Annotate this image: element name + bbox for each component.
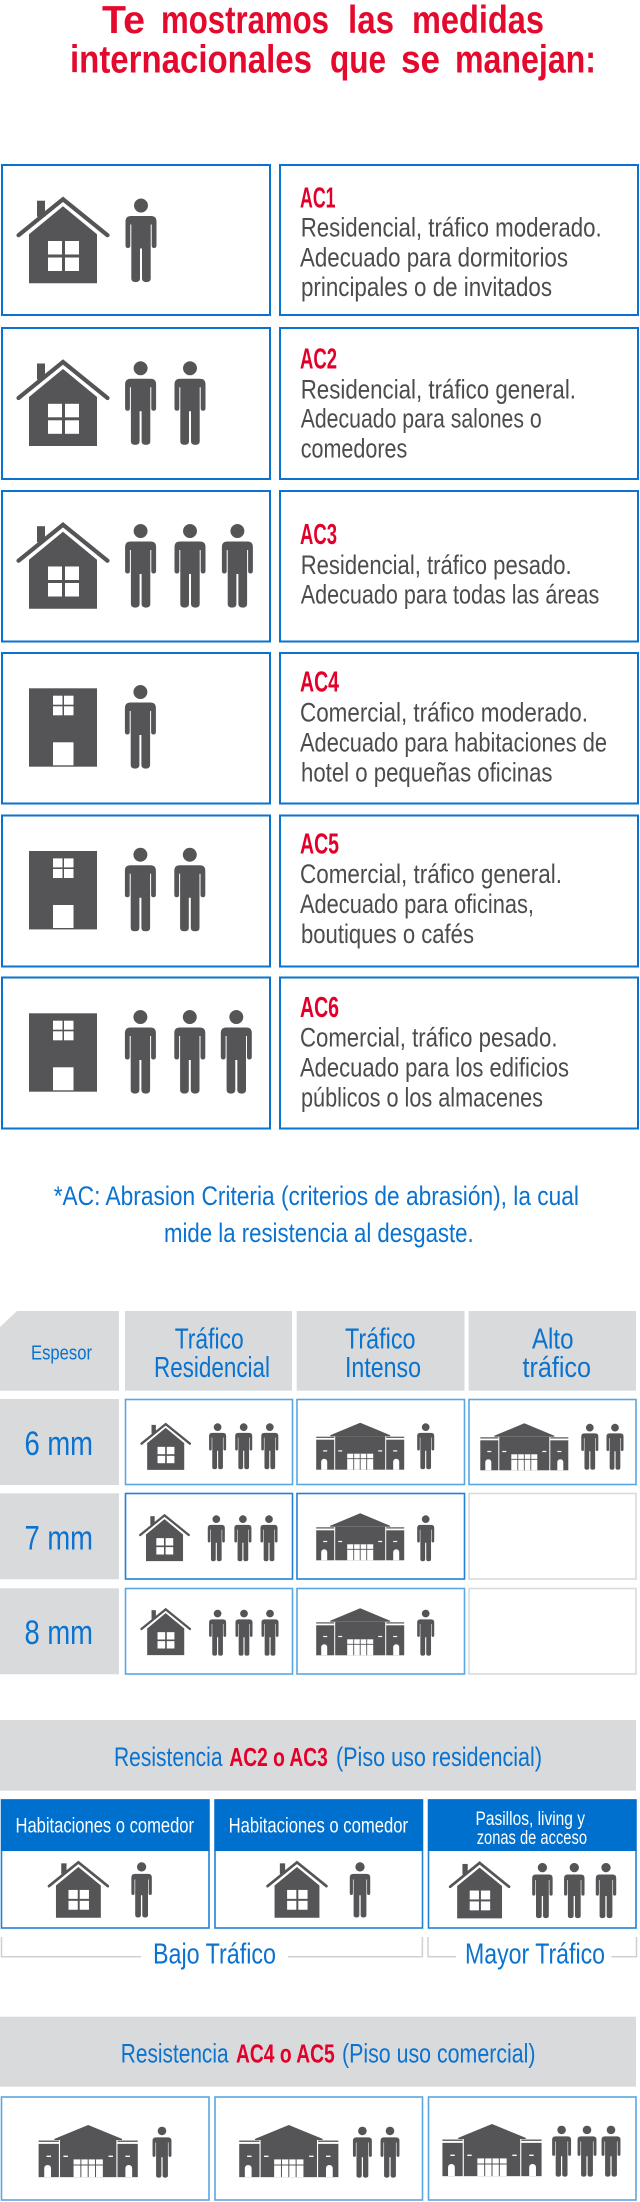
card: commercial, two people: [215, 2097, 422, 2200]
thickness table: [0, 1311, 636, 1674]
banner: commercial resistance: Resistencia: [121, 2039, 229, 2069]
icon: building: [29, 1013, 97, 1092]
footnote: mide la resistencia al desgaste.: [164, 1218, 474, 1248]
panel: AC1 row: [2, 165, 638, 315]
cell: intense, 6 mm: [297, 1400, 464, 1484]
AC3 label: AC3: [300, 519, 337, 551]
title: manejan:: [455, 39, 596, 82]
AC5 description: boutiques o cafés: [301, 919, 474, 949]
cell: intense, 7 mm: [297, 1494, 464, 1579]
AC2 label: AC2: [300, 343, 337, 375]
icon: house: [18, 199, 108, 283]
AC4 description: Comercial, tráfico moderado.: [300, 698, 588, 728]
header: Alto tráfico: Alto: [532, 1324, 574, 1356]
AC6 label: AC6: [300, 992, 339, 1024]
AC4 text panel: [280, 653, 638, 804]
label: 8 mm: 8 mm: [24, 1614, 93, 1652]
panel: AC6 row: [2, 978, 638, 1128]
icon: person 2: [174, 524, 206, 608]
footnote: [54, 1181, 579, 1248]
row: 7 mm: [0, 1493, 636, 1579]
header: Tráfico Intenso: Tráfico: [345, 1324, 416, 1356]
icon: person 3: [221, 1010, 252, 1094]
cell: high traffic, 6 mm: [469, 1400, 636, 1484]
icon: house: [18, 362, 108, 446]
icon: person: [126, 198, 156, 282]
header: Tráfico Residencial: [125, 1311, 292, 1391]
icon: person 2: [174, 848, 205, 931]
AC1 label: AC1: [300, 182, 336, 214]
AC3 text panel: [280, 491, 638, 642]
header: Tráfico Intenso: [297, 1311, 464, 1391]
AC2 text panel: [280, 328, 638, 479]
card: commercial, one person: [2, 2097, 209, 2200]
bracket: Bajo Tráfico: [2, 1937, 422, 1970]
label: 6 mm: 6 mm: [24, 1425, 93, 1463]
header: Alto tráfico: [469, 1311, 636, 1391]
cell: empty, 7 mm: [469, 1494, 636, 1579]
AC4 description: hotel o pequeñas oficinas: [301, 758, 552, 788]
header: Tráfico Residencial: Residencial: [154, 1352, 270, 1384]
card: Pasillos, living y zonas de acceso: [428, 1799, 636, 1928]
AC3 icon panel: [2, 491, 270, 642]
AC1 description: principales o de invitados: [301, 272, 552, 302]
AC4 description: [300, 698, 607, 788]
title: mostramos: [161, 0, 329, 42]
title: las: [348, 0, 394, 42]
panel: AC4 row: [2, 653, 638, 804]
banner: commercial resistance: AC4 o AC5: [236, 2039, 335, 2069]
AC3 description: Residencial, tráfico pesado.: [301, 550, 572, 580]
cell: residential, 6 mm: [126, 1400, 292, 1484]
AC6 icon panel: [2, 978, 270, 1128]
AC4 icon panel: [2, 653, 270, 804]
AC6 text panel: [280, 978, 638, 1128]
card: Habitaciones o comedor, low traffic: Habitaciones o comedor: [16, 1815, 194, 1838]
AC4 label: AC4: [300, 667, 339, 699]
row: 6 mm: [0, 1399, 636, 1485]
header: Tráfico Intenso: Intenso: [345, 1352, 421, 1384]
title: internacionales: [70, 39, 312, 82]
AC6 description: públicos o los almacenes: [301, 1083, 543, 1113]
card: Habitaciones o comedor, second: [214, 1799, 423, 1928]
AC5 description: Comercial, tráfico general.: [300, 859, 562, 889]
header: Espesor: Espesor: [31, 1341, 92, 1364]
icon: house: [18, 525, 108, 609]
AC5 description: [300, 859, 562, 949]
card: Pasillos, living y zonas de acceso: zonas de acceso: [477, 1828, 587, 1849]
AC6 description: Adecuado para los edificios: [300, 1053, 569, 1083]
title: Te: [102, 0, 145, 42]
AC6 description: Comercial, tráfico pesado.: [300, 1023, 558, 1053]
cell: residential, 7 mm: [126, 1494, 292, 1579]
card: Habitaciones o comedor, low traffic: [1, 1799, 210, 1928]
banner: residential resistance: (Piso uso residencial): [336, 1742, 542, 1772]
title: medidas: [412, 0, 544, 42]
banner: commercial resistance: [0, 2017, 636, 2087]
bracket: Bajo Tráfico: Bajo Tráfico: [153, 1938, 276, 1970]
banner: residential resistance: AC2 o AC3: [229, 1742, 328, 1772]
card: Pasillos, living y zonas de acceso: Pasillos, living y: [476, 1809, 585, 1830]
AC6 description: [300, 1023, 569, 1113]
panel: AC2 row: [2, 328, 638, 479]
banner: residential resistance: [0, 1720, 636, 1791]
AC2 icon panel: [2, 328, 270, 479]
header: Espesor: [0, 1311, 119, 1391]
title: se: [401, 39, 440, 82]
AC2 description: Adecuado para salones o: [301, 404, 542, 434]
icon: building: [29, 688, 97, 767]
panel: AC5 row: [2, 816, 638, 966]
bracket: Mayor Tráfico: Mayor Tráfico: [465, 1938, 605, 1970]
card: commercial, three people: [428, 2097, 636, 2200]
label: 7 mm: 7 mm: [24, 1519, 93, 1557]
row: 8 mm: [0, 1588, 636, 1674]
banner: commercial resistance: (Piso uso comercial): [342, 2039, 536, 2069]
AC1 text panel: [280, 165, 638, 315]
AC2 description: Residencial, tráfico general.: [301, 374, 576, 404]
icon: person 2: [174, 1010, 205, 1094]
panel: commercial cards: [2, 2097, 636, 2200]
label: 8 mm: [0, 1588, 119, 1674]
cell: residential, 8 mm: [126, 1588, 292, 1674]
cell: empty, 8 mm: [469, 1588, 636, 1674]
card: Habitaciones o comedor, second: Habitaciones o comedor: [229, 1815, 408, 1838]
cell: intense, 8 mm: [297, 1588, 464, 1674]
AC5 icon panel: [2, 816, 270, 966]
title: [70, 0, 596, 82]
AC5 text panel: [280, 816, 638, 966]
AC1 icon panel: [2, 165, 270, 315]
panel: AC3 row: [2, 491, 638, 642]
AC5 description: Adecuado para oficinas,: [300, 889, 534, 919]
AC5 label: AC5: [300, 828, 339, 860]
banner: residential resistance: Resistencia: [114, 1742, 223, 1772]
header: Tráfico Residencial: Tráfico: [175, 1324, 244, 1356]
AC1 description: [300, 213, 602, 302]
icon: building: [29, 851, 97, 929]
icon: person 3: [222, 524, 253, 608]
label: 7 mm: [0, 1493, 119, 1579]
label: 6 mm: [0, 1399, 119, 1485]
icon: person: [125, 685, 156, 769]
AC3 description: [301, 550, 599, 609]
title: que: [330, 39, 386, 82]
icon: person 1: [125, 1010, 156, 1094]
header: Alto tráfico: tráfico: [522, 1352, 591, 1384]
icon: person 1: [125, 524, 156, 608]
icon: person 2: [174, 361, 206, 445]
AC1 description: Adecuado para dormitorios: [300, 243, 568, 273]
AC2 description: comedores: [301, 433, 407, 463]
icon: person 1: [125, 848, 156, 931]
AC2 description: [301, 374, 576, 463]
panel: residential cards: [1, 1799, 636, 1928]
icon: person 1: [125, 361, 156, 445]
